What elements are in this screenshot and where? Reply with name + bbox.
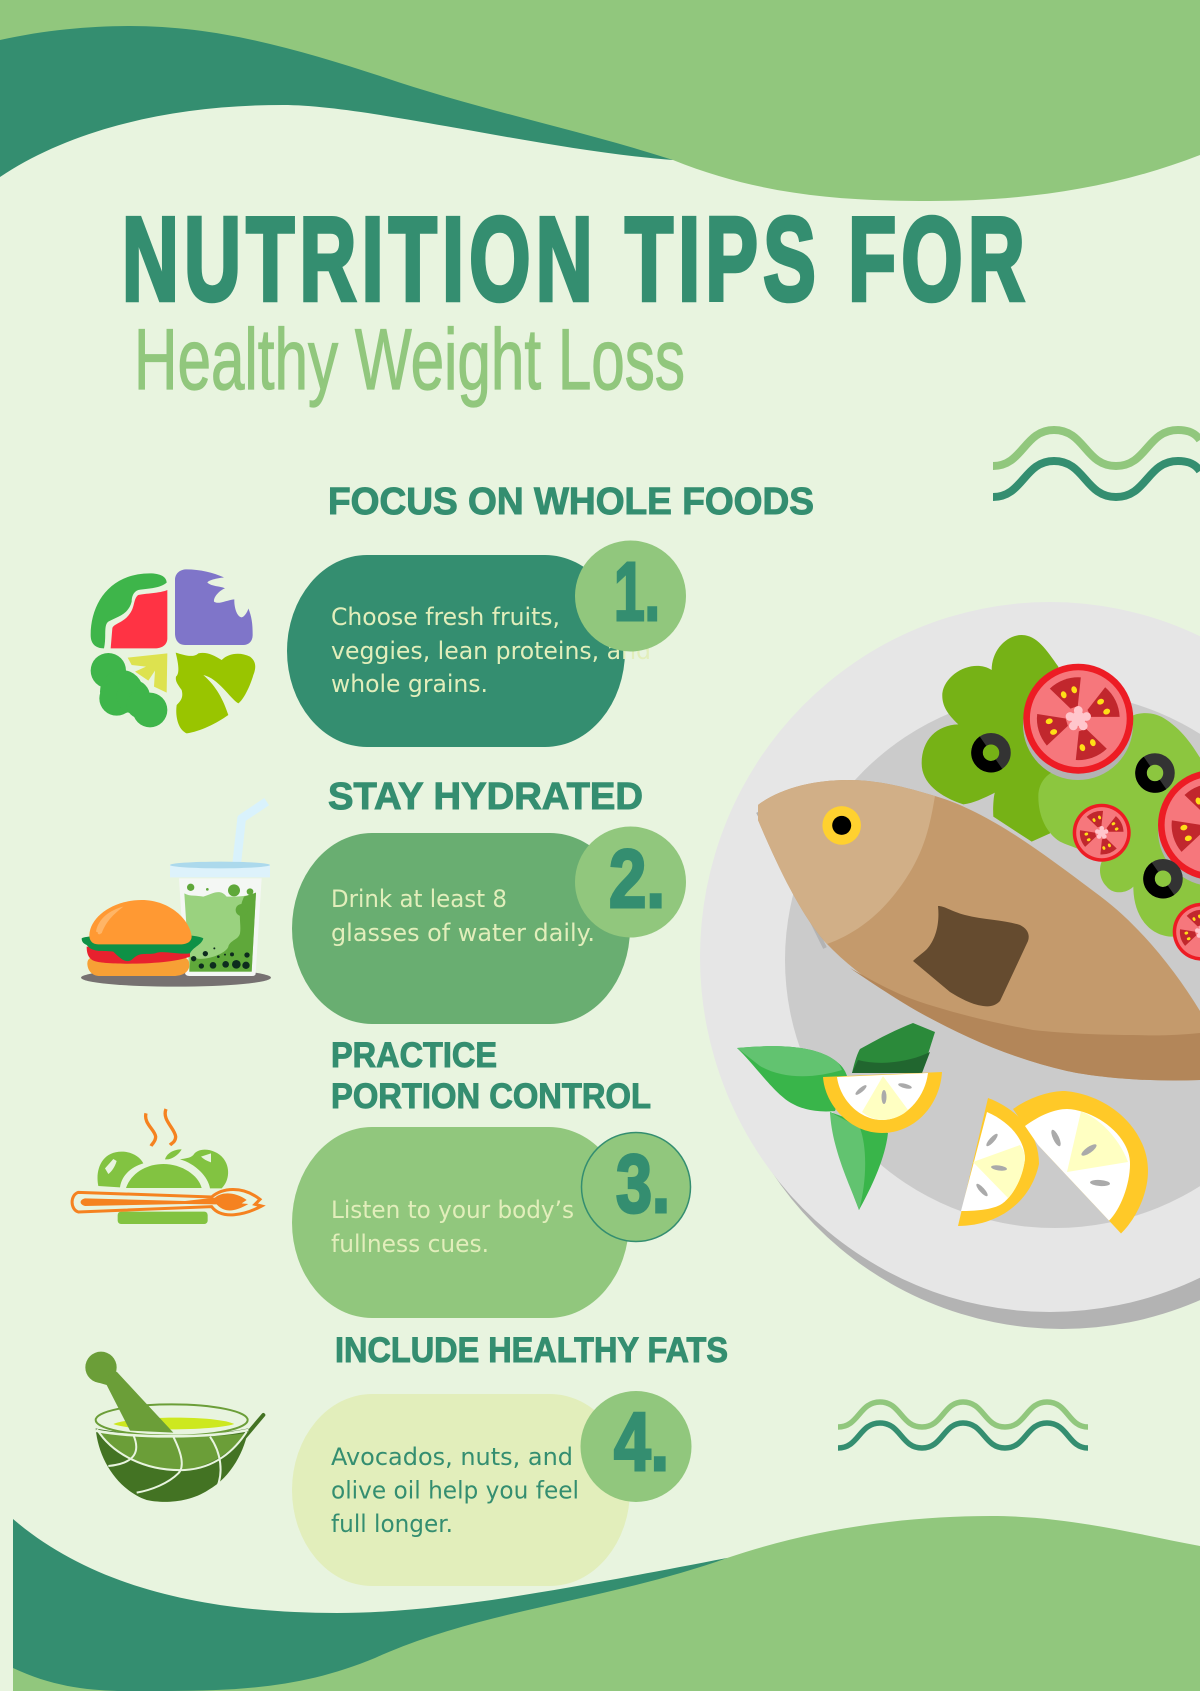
number badge 4 bbox=[580, 1391, 692, 1502]
heading 3: PRACTICE bbox=[331, 1036, 497, 1075]
heading 3: PORTION CONTROL bbox=[331, 1077, 651, 1116]
decorative waves top right bbox=[993, 430, 1200, 497]
number badge 3: 3. bbox=[616, 1137, 670, 1230]
bottom wave banner bbox=[13, 1516, 1200, 1691]
tip 4: healthy fats bbox=[85, 1331, 728, 1586]
body text 4: Avocados, nuts, and bbox=[331, 1443, 573, 1471]
pill 3 bbox=[292, 1127, 629, 1318]
body text 4 bbox=[331, 1443, 579, 1538]
number badge 2 bbox=[575, 826, 686, 938]
body text 1: Choose fresh fruits, bbox=[331, 603, 560, 631]
decorative waves lower right bbox=[838, 1402, 1088, 1448]
body text 2: Drink at least 8 bbox=[331, 885, 507, 913]
body text 3: Listen to your body’s bbox=[331, 1196, 574, 1224]
tip 3: portion control bbox=[72, 1036, 691, 1318]
body text 1 bbox=[331, 603, 651, 698]
tip 2: hydration bbox=[81, 776, 686, 1024]
heading 1: FOCUS ON WHOLE FOODS bbox=[328, 481, 814, 523]
number badge 2: 2. bbox=[609, 832, 665, 925]
icon: burger and drink bbox=[81, 802, 271, 987]
number badge 1 bbox=[575, 540, 686, 652]
fish bbox=[758, 780, 1200, 1081]
top wave banner bbox=[0, 0, 1200, 201]
heading 4: INCLUDE HEALTHY FATS bbox=[335, 1331, 728, 1370]
body text 2 bbox=[331, 885, 595, 947]
number badge 1: 1. bbox=[614, 545, 660, 638]
plate bbox=[700, 602, 1200, 1329]
icon: mortar and pestle bbox=[85, 1352, 263, 1502]
number badge 3 bbox=[582, 1132, 690, 1242]
body text 4: full longer. bbox=[331, 1510, 453, 1538]
herb leaves bbox=[737, 1023, 935, 1210]
body text 3 bbox=[331, 1196, 574, 1258]
tip 1: whole foods bbox=[91, 481, 814, 747]
body text 1: veggies, lean proteins, and bbox=[331, 637, 651, 665]
pill 1 bbox=[287, 555, 625, 747]
subtitle: Healthy Weight Loss bbox=[134, 312, 685, 408]
pill 4 bbox=[292, 1394, 630, 1586]
plate illustration bbox=[700, 602, 1200, 1329]
heading 2: STAY HYDRATED bbox=[328, 776, 643, 818]
body text 4: olive oil help you feel bbox=[331, 1476, 579, 1504]
icon: served dish and spoon bbox=[72, 1109, 262, 1224]
body text 1: whole grains. bbox=[331, 670, 488, 698]
icon: food quadrant bbox=[91, 569, 255, 733]
lemon slices bbox=[823, 1072, 1148, 1234]
pill 2 bbox=[292, 833, 630, 1024]
body text 2: glasses of water daily. bbox=[331, 919, 595, 947]
body text 3: fullness cues. bbox=[331, 1230, 489, 1258]
lettuce and toppings bbox=[922, 635, 1200, 961]
number badge 4: 4. bbox=[614, 1395, 669, 1488]
heading 3 bbox=[331, 1036, 651, 1116]
